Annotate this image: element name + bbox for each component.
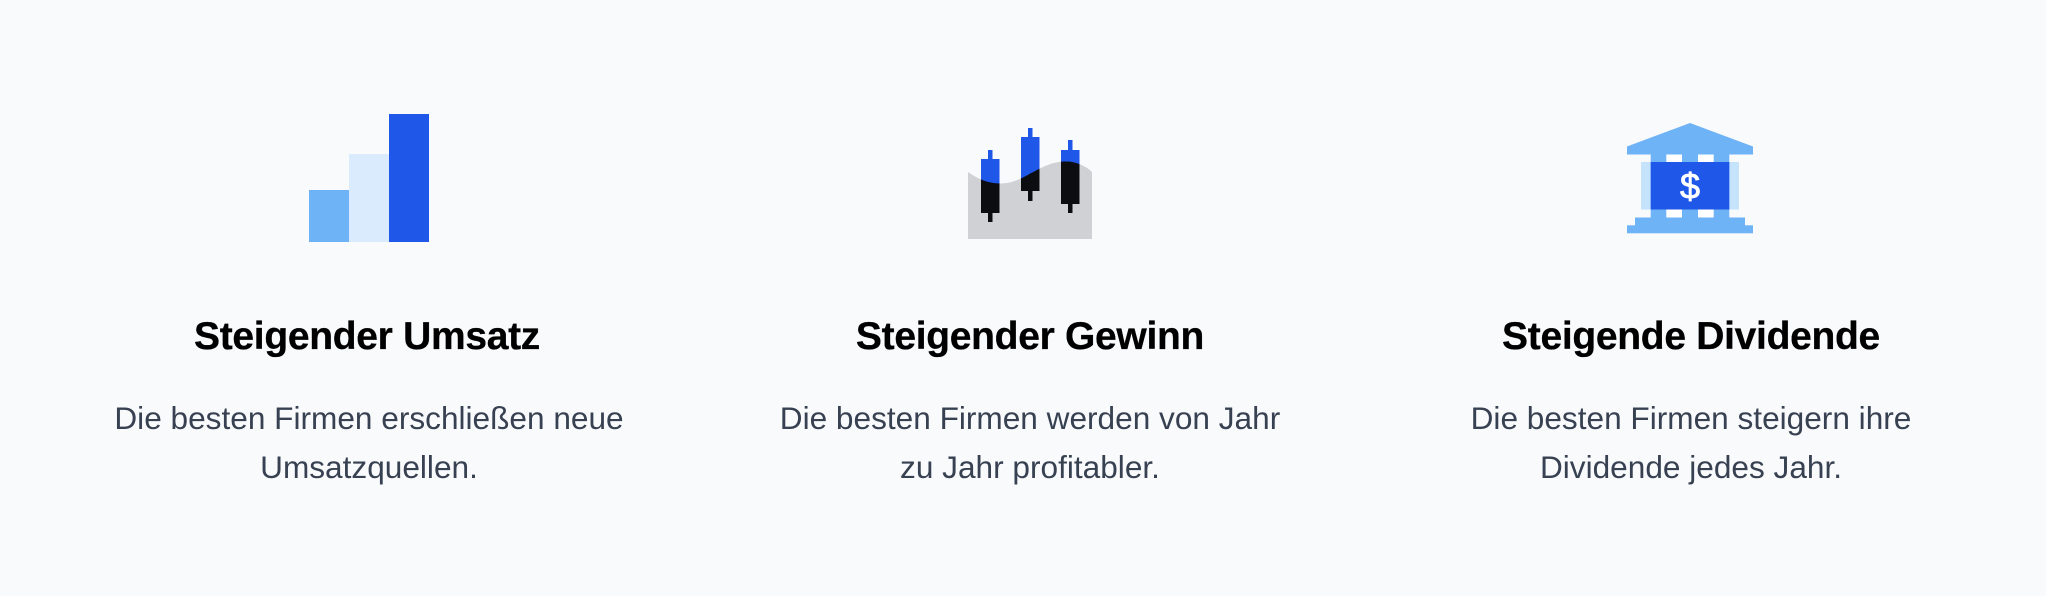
text: dividend description xyxy=(1471,400,1911,485)
text: revenue description: Die besten Firmen erschließen neue xyxy=(114,400,624,436)
panel: Steigende Dividende xyxy=(1471,123,1911,485)
text: dividend description: Die besten Firmen steigern ihre xyxy=(1471,400,1911,436)
heading: Steigende Dividende: Steigende Dividende xyxy=(1502,315,1880,358)
text: profit description xyxy=(780,400,1280,485)
panel: Steigender Gewinn xyxy=(780,128,1280,485)
text: profit description: Die besten Firmen werden von Jahr xyxy=(780,400,1280,436)
icon: rising bar chart xyxy=(309,114,429,242)
text: profit description: zu Jahr profitabler. xyxy=(900,449,1160,485)
heading: Steigender Umsatz: Steigender Umsatz xyxy=(194,315,540,358)
icon: bank building with dollar note: $ xyxy=(1680,166,1700,206)
icon: candlestick chart with area xyxy=(968,128,1092,239)
text: dividend description: Dividende jedes Jahr. xyxy=(1540,449,1842,485)
panel: Steigender Umsatz xyxy=(114,114,624,485)
text: revenue description: Umsatzquellen. xyxy=(260,449,478,485)
icon: bank building with dollar note xyxy=(1627,123,1753,234)
heading: Steigender Gewinn: Steigender Gewinn xyxy=(856,315,1204,358)
text: revenue description xyxy=(114,400,624,485)
